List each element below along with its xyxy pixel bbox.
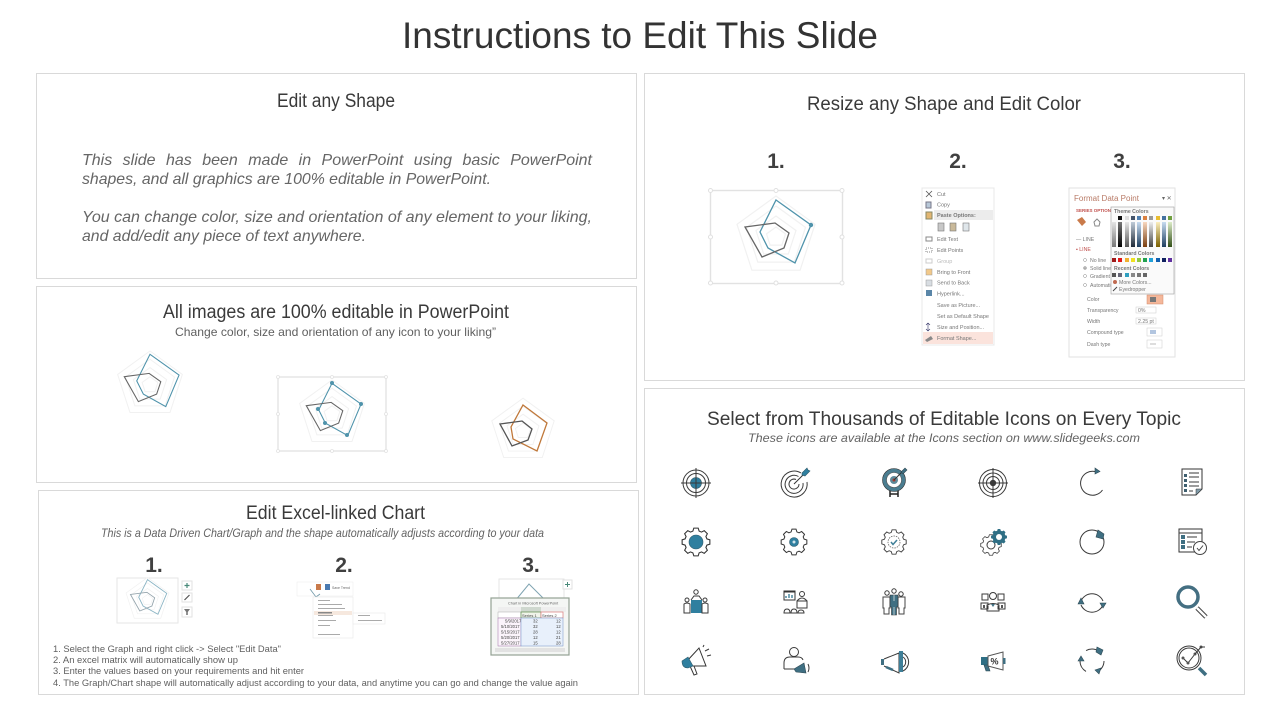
- context menu screenshot: [922, 188, 994, 345]
- icon: gear with teal ring: [781, 529, 807, 555]
- format data point pane screenshot: Solid line: [1090, 266, 1111, 272]
- step 3: excel data window: Series 2: [542, 613, 557, 618]
- format data point pane screenshot: 2.25 pt: [1138, 319, 1154, 325]
- heading: images editable: All images are 100% editable in PowerPoint: [163, 302, 510, 323]
- step number 1: 1.: [767, 150, 785, 173]
- heading: excel chart: Edit Excel-linked Chart: [246, 503, 426, 524]
- step 3: excel data window: 5/27/2017: [501, 640, 520, 646]
- title: Instructions to Edit This Slide: [402, 15, 878, 56]
- step 3: excel data window: 12: [556, 630, 561, 634]
- colour picker popup: Eyedropper: [1119, 287, 1146, 293]
- step 3: excel data window: 21: [556, 635, 561, 640]
- icon: two arc arrows: [1078, 594, 1106, 612]
- context menu screenshot: Group: [937, 259, 952, 265]
- format data point pane screenshot: No line: [1090, 258, 1106, 264]
- panel: excel-linked chart: [38, 490, 638, 694]
- format data point pane screenshot: SERIES OPTIONS: [1076, 208, 1114, 213]
- context menu screenshot: Cut: [937, 192, 946, 198]
- icon: presentation: [784, 591, 807, 613]
- step 3: excel data window: 15: [533, 640, 538, 646]
- step 3: excel data window: 5/9/2017: [505, 618, 522, 624]
- icon: business team: [883, 589, 905, 615]
- text block: editing instructions: You can change color, size and orientation of any element to your liking,: [82, 209, 592, 226]
- context menu screenshot: Save as Picture...: [937, 303, 981, 309]
- context menu screenshot: Edit Text: [937, 237, 958, 243]
- format data point pane screenshot: Automatic: [1090, 283, 1113, 289]
- panel: editable icons: [644, 388, 1244, 694]
- step number 1: 1.: [145, 554, 163, 577]
- format data point pane screenshot: ▪ LINE: [1076, 247, 1091, 253]
- icon: dark crosshair: [978, 468, 1008, 498]
- icon: archery target on stand: [882, 468, 907, 497]
- icon: three arc arrows: [1078, 647, 1104, 674]
- step 2: chart context menu: [297, 582, 385, 638]
- subheading: change icon: Change color, size and orientation of any icon to your liking”: [175, 325, 496, 339]
- format data point pane screenshot: — LINE: [1076, 237, 1095, 243]
- step 3: excel data window: 5/20/2017: [501, 635, 520, 640]
- instructions list: 1. Select the Graph and right click -> Select "Edit Data": [53, 644, 281, 655]
- context menu screenshot: Edit Points: [937, 248, 964, 254]
- heading: edit any shape: Edit any Shape: [277, 91, 395, 112]
- format data point pane screenshot: Format Data Point: [1074, 194, 1140, 203]
- icon: person with megaphone: [784, 648, 809, 673]
- icon: teal megaphone: [682, 645, 711, 675]
- step 3: excel data window: 5/10/2017: [501, 624, 520, 629]
- format data point pane screenshot: Width: [1087, 319, 1100, 325]
- colour picker popup: Theme Colors: [1114, 209, 1149, 215]
- step 3: excel data window: 12: [533, 635, 538, 640]
- icon: outlined team: [981, 592, 1005, 611]
- icon: magnifier with chart: [1177, 646, 1206, 675]
- context menu screenshot: Size and Position...: [937, 325, 985, 331]
- step number 3: 3.: [1113, 150, 1131, 173]
- radar chart with resize handles: [708, 188, 844, 285]
- context menu screenshot: Set as Default Shape: [937, 314, 989, 320]
- icon: group with teal leader: [684, 590, 708, 613]
- icon: dart target: [781, 468, 810, 497]
- instructions list: 2. An excel matrix will automatically show up: [53, 655, 238, 666]
- format data point pane screenshot: Color: [1087, 297, 1100, 303]
- format data point pane screenshot: Transparency: [1087, 308, 1119, 314]
- icon: single arc arrow: [1081, 468, 1102, 495]
- icon: two gears: [981, 529, 1007, 555]
- step 3: excel data window: 32: [533, 618, 538, 624]
- format data point pane screenshot: Dash type: [1087, 342, 1110, 348]
- icon: circular arrow: [1080, 530, 1104, 554]
- radar chart: orange: [492, 398, 554, 458]
- context menu screenshot: Send to Back: [937, 280, 970, 286]
- radar chart: selected with handles: [276, 376, 388, 452]
- text block: editing instructions: This slide has been made in PowerPoint using basic PowerPoint: [82, 152, 593, 169]
- colour picker popup: Recent Colors: [1114, 266, 1149, 272]
- heading: resize: Resize any Shape and Edit Color: [807, 94, 1082, 115]
- format data point pane screenshot: Gradient line: [1090, 274, 1120, 280]
- icon: magnifier: [1178, 587, 1206, 617]
- format data point pane screenshot: Compound type: [1087, 330, 1124, 336]
- icon: gear with teal core: [682, 528, 710, 556]
- step 3: excel data window: Series 1: [522, 613, 537, 618]
- step 1: chart with side buttons: [117, 577, 192, 623]
- heading: icons: Select from Thousands of Editable Icons on Every Topic: [707, 409, 1181, 430]
- icon: checklist document: [1182, 469, 1202, 495]
- icon: crosshair target: [681, 468, 711, 498]
- icon: checklist window with tick: [1179, 529, 1206, 554]
- step 3: excel data window: [491, 579, 572, 655]
- context menu screenshot: Format Shape...: [937, 336, 977, 342]
- step 2: chart context menu: Save Trend: [332, 586, 350, 590]
- format data point pane screenshot: ▾ ✕: [1162, 196, 1172, 202]
- icon: gear with check: [882, 530, 906, 554]
- step 3: excel data window: 28: [533, 630, 538, 634]
- step 3: excel data window: 5/15/2017: [501, 630, 520, 634]
- text block: editing instructions: shapes, and all graphics are 100% editable in PowerPoint.: [82, 171, 491, 188]
- text block: editing instructions: [82, 152, 593, 245]
- icon: horizontal megaphone: [881, 651, 909, 673]
- colour picker popup: [1111, 207, 1174, 294]
- colour picker popup: Standard Colors: [1114, 251, 1154, 257]
- colour picker popup: More Colors...: [1119, 280, 1152, 286]
- context menu screenshot: Hyperlink...: [937, 292, 965, 298]
- icon: percent megaphone: %: [990, 656, 999, 666]
- context menu screenshot: Copy: [937, 202, 950, 208]
- context menu screenshot: Paste Options:: [937, 213, 976, 219]
- subheading: icons source: These icons are available at the Icons section on www.slidegeeks.com: [748, 431, 1140, 445]
- step 3: excel data window: 28: [556, 640, 561, 646]
- format data point pane screenshot: 0%: [1138, 308, 1146, 314]
- step number 2: 2.: [949, 150, 967, 173]
- step 3: excel data window: 32: [533, 624, 538, 629]
- step number 3: 3.: [522, 554, 540, 577]
- icon: percent megaphone: [981, 652, 1006, 671]
- instructions list: [53, 644, 578, 689]
- format data point pane screenshot: [1069, 188, 1175, 357]
- panel: edit any shape: [36, 74, 636, 278]
- step number 2: 2.: [335, 554, 353, 577]
- step 3: excel data window: 12: [556, 618, 561, 624]
- context menu screenshot: Bring to Front: [937, 270, 971, 276]
- step 3: excel data window: 12: [556, 624, 561, 629]
- text block: editing instructions: and add/edit any piece of text anywhere.: [82, 228, 366, 245]
- instructions list: 3. Enter the values based on your requirements and hit enter: [53, 666, 304, 677]
- subheading: data driven: This is a Data Driven Chart/Graph and the shape automatically adjusts according to your data: [101, 526, 544, 540]
- panel: resize and edit color: [644, 74, 1244, 380]
- step 3: excel data window: Chart in Microsoft PowerPoint: [508, 602, 559, 606]
- radar chart: plain teal: [118, 351, 182, 413]
- panel: images editable: [36, 286, 636, 482]
- instructions list: 4. The Graph/Chart shape will automatically adjust according to your data, and anytime you can go and change the value again: [53, 678, 578, 689]
